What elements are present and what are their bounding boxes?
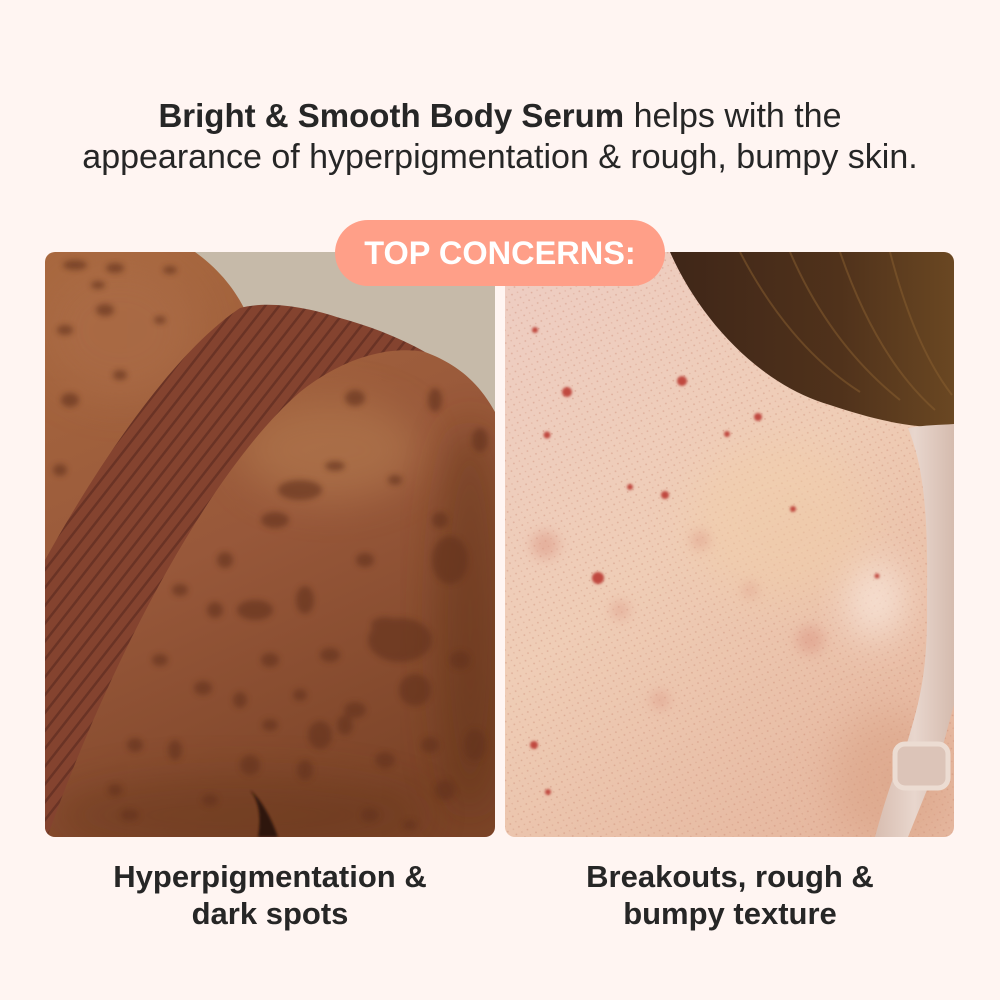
badge: top concerns: TOP CONCERNS: bbox=[364, 235, 636, 271]
panel: hyperpigmentation photo bbox=[40, 252, 505, 855]
icon: strap adjuster bbox=[895, 744, 948, 788]
panel: breakouts and texture photo bbox=[505, 252, 954, 850]
caption: right bbox=[586, 859, 874, 931]
hair strands bbox=[740, 252, 952, 410]
title: intro text: Bright & Smooth Body Serum helps with the bbox=[158, 97, 842, 135]
caption: left: dark spots bbox=[192, 896, 348, 931]
caption: right: Breakouts, rough & bbox=[586, 859, 874, 894]
caption: right: bumpy texture bbox=[623, 896, 837, 931]
title: intro text: appearance of hyperpigmentation & rough, bumpy skin. bbox=[82, 138, 918, 176]
caption: left: Hyperpigmentation & bbox=[113, 859, 427, 894]
badge: top concerns bbox=[335, 220, 665, 286]
caption: left bbox=[113, 859, 427, 931]
title: intro text bbox=[82, 97, 918, 176]
